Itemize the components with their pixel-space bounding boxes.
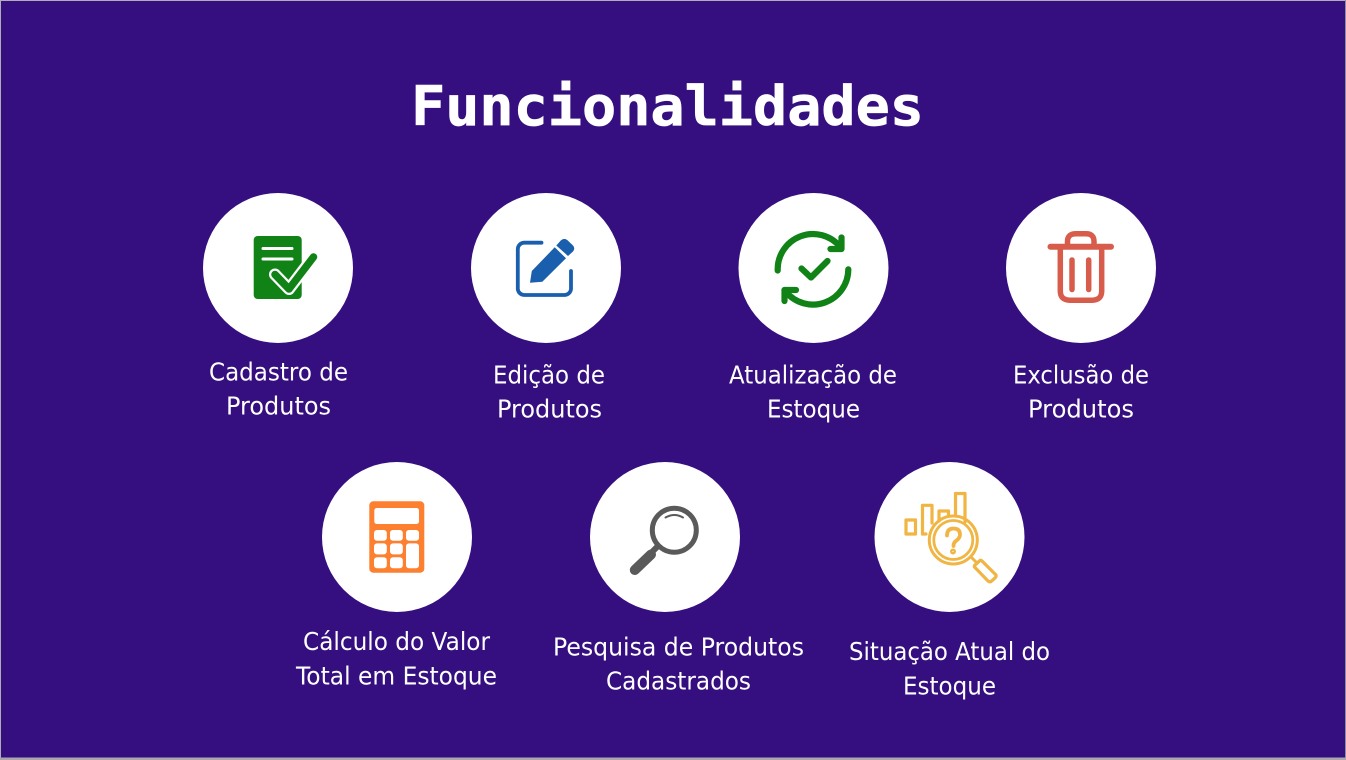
label [209, 358, 348, 420]
circle: edição [471, 193, 621, 343]
label: Cadastro de [209, 358, 348, 386]
label: Cadastrados [606, 666, 751, 696]
item: Cadastro de Produtos [203, 193, 353, 420]
label [553, 632, 804, 696]
item: Pesquisa de Produtos Cadastrados [553, 462, 804, 696]
label: Produtos [226, 392, 331, 420]
label: Exclusão de [1013, 360, 1149, 390]
circle: cálculo [322, 462, 472, 612]
icon: document with check [254, 236, 314, 299]
label: Produtos [497, 394, 602, 424]
label: Situação Atual do [849, 637, 1050, 666]
label [1013, 360, 1149, 424]
icon: chart with magnifier question [906, 494, 996, 582]
icon: sync arrows with check [778, 234, 848, 305]
icon: calculator [369, 501, 424, 573]
label: Produtos [1028, 394, 1134, 424]
label [493, 360, 605, 424]
item: Cálculo do Valor Total em Estoque [295, 462, 497, 690]
icon: magnifying glass [635, 508, 696, 570]
circle: exclusão [1006, 193, 1156, 343]
title: Funcionalidades [411, 75, 924, 138]
label: Estoque [903, 672, 996, 700]
circle: atualização [738, 193, 888, 343]
label: Atualização de [729, 360, 897, 390]
icon: pencil on square [518, 239, 574, 295]
label [295, 627, 497, 690]
icon: trash can [1050, 234, 1111, 300]
label: Total em Estoque [295, 662, 497, 690]
label: Cálculo do Valor [303, 627, 491, 656]
label: Pesquisa de Produtos [553, 632, 804, 662]
item: Situação Atual do Estoque [849, 462, 1050, 700]
label: Edição de [493, 360, 605, 390]
circle: pesquisa [590, 462, 740, 612]
item: Edição de Produtos [471, 193, 621, 424]
label [849, 637, 1050, 700]
label: Estoque [767, 394, 860, 424]
label [729, 360, 897, 424]
circle: cadastro [203, 193, 353, 343]
item: Exclusão de Produtos [1006, 193, 1156, 424]
circle: situação [874, 462, 1024, 612]
item: Atualização de Estoque [729, 193, 897, 424]
